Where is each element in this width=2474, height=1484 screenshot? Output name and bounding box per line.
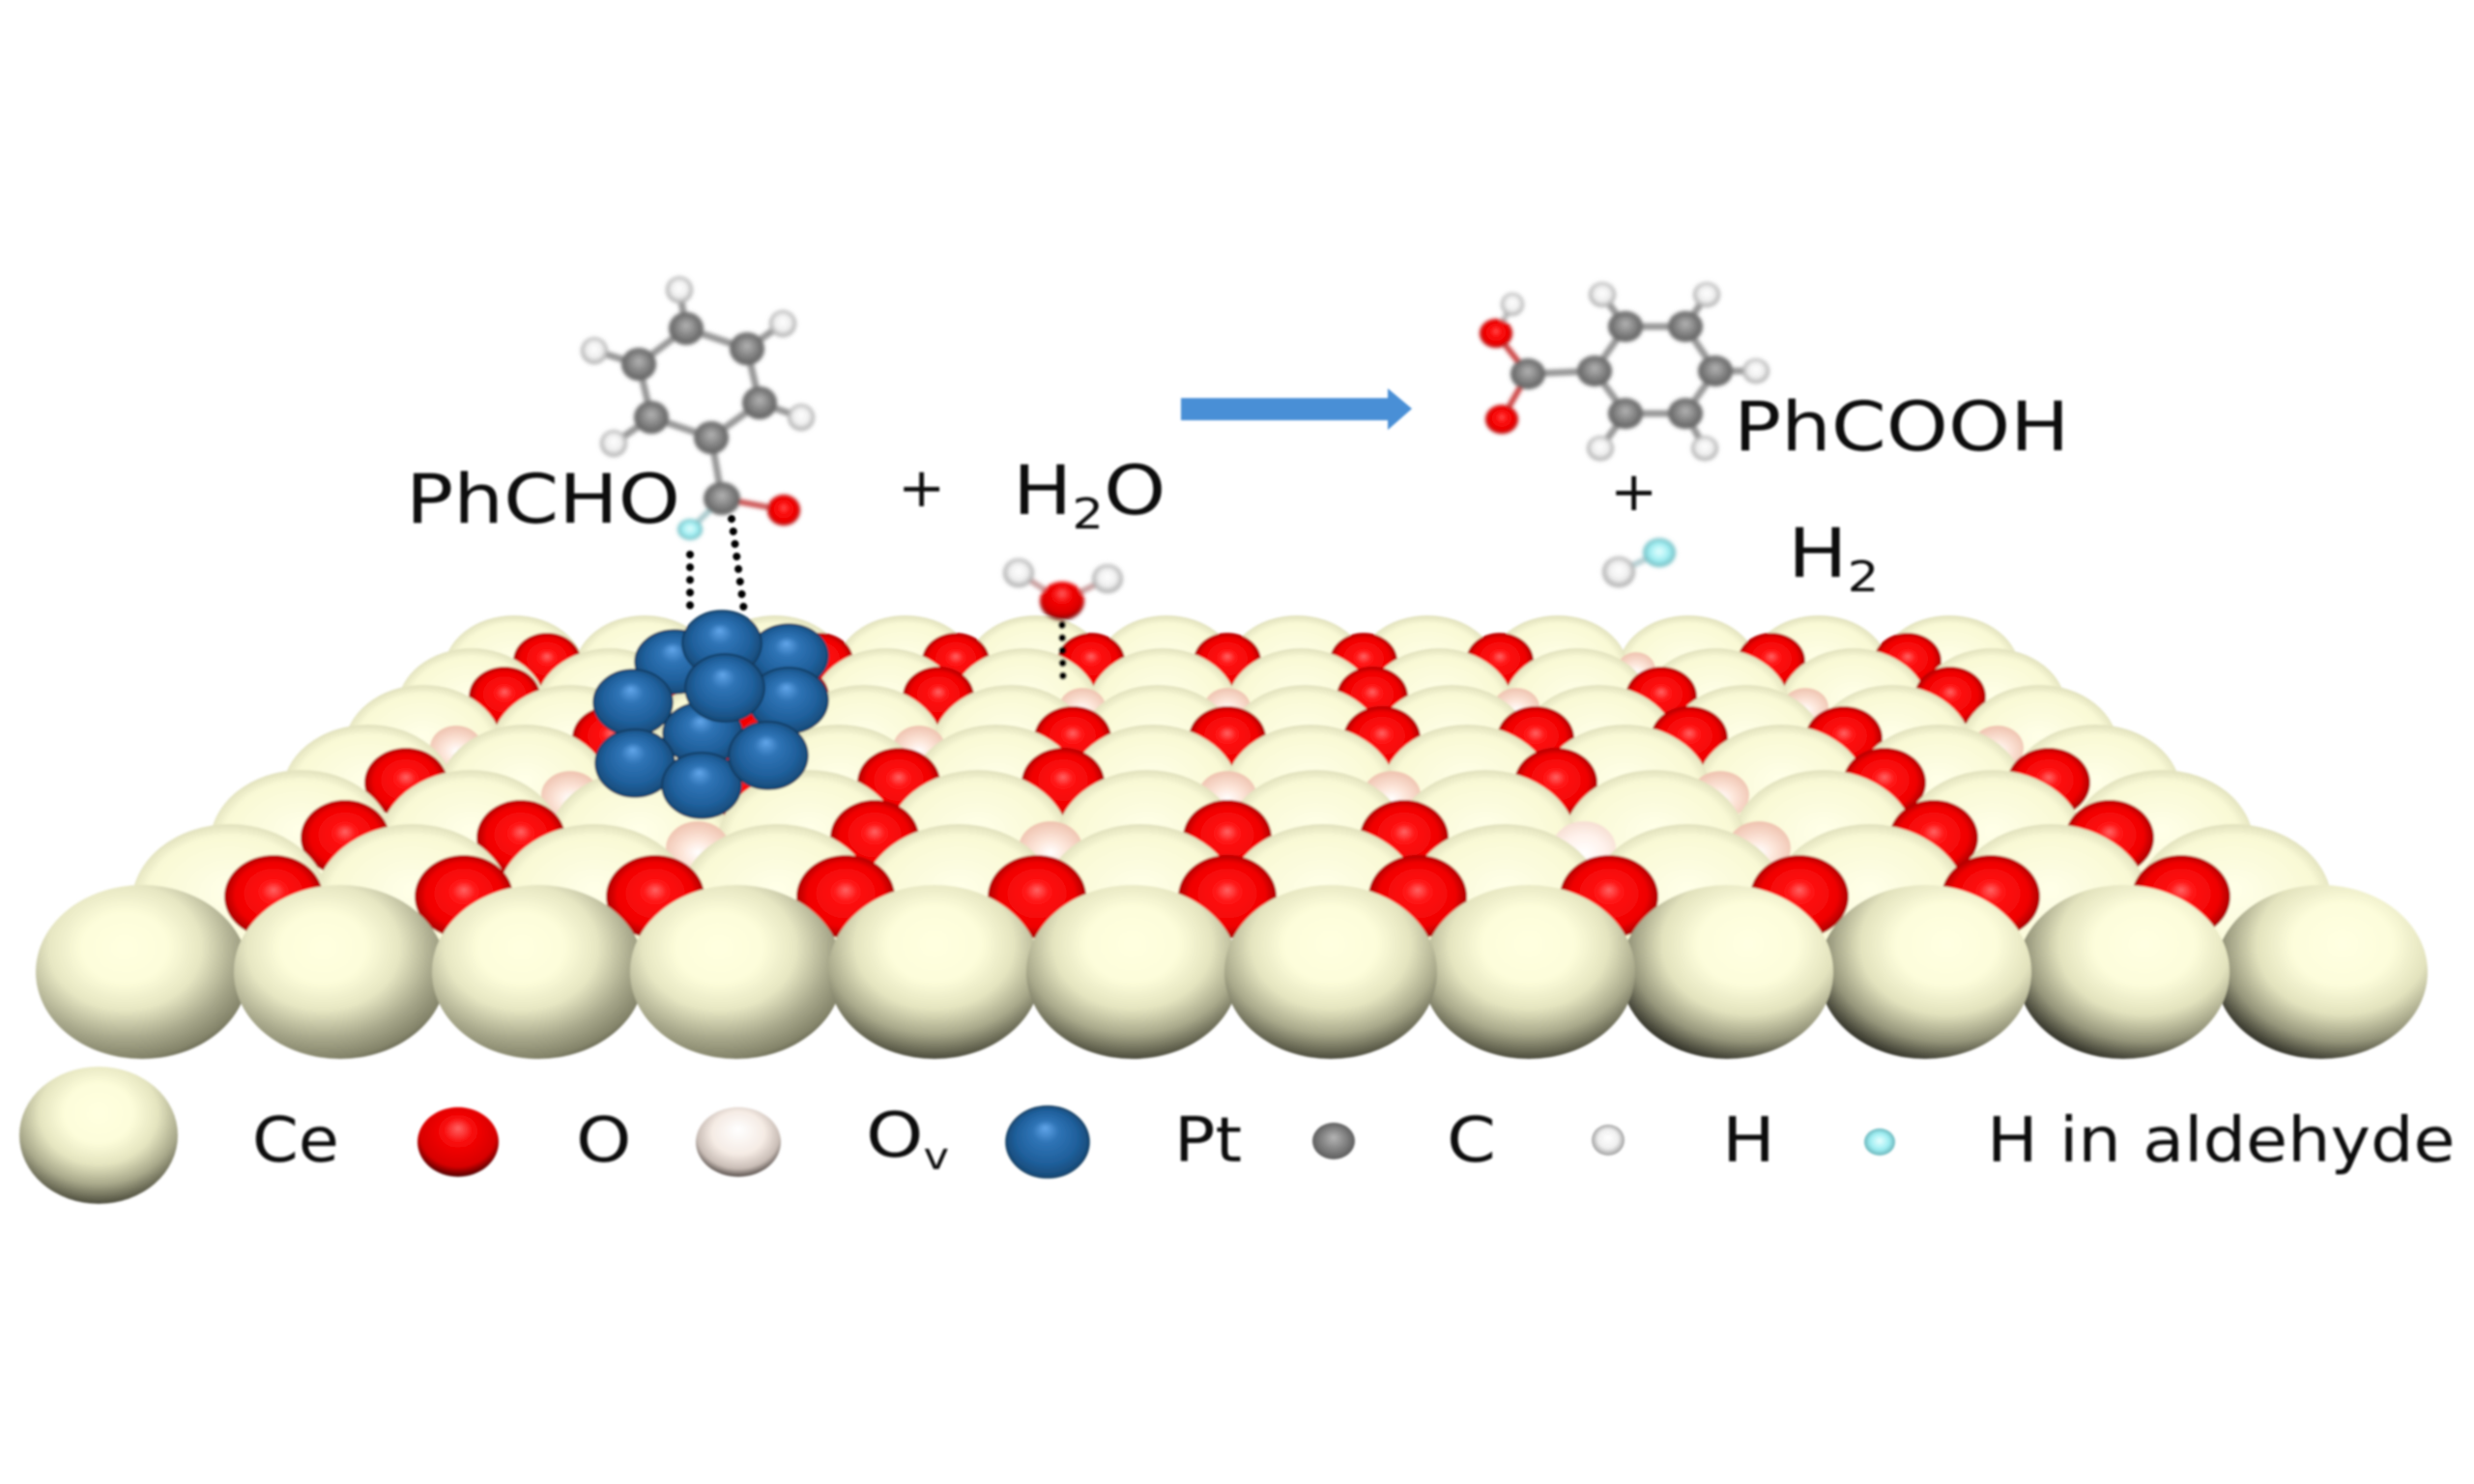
Ce row 1 (front) [36,885,2428,1059]
O row d [430,706,2024,770]
molecule: benzaldehyde PhCHO [581,276,815,540]
legend: H in aldehyde: H in aldehyde [1987,1104,2456,1176]
plus sign right: + [1610,460,1657,524]
legend: Ce [19,1067,339,1204]
label: H2: 2 [1848,553,1879,602]
Ce row 6 [397,648,2066,768]
Ce row 7 (back) [444,615,2020,728]
dotted bonds: aldehyde to Pt [690,519,744,612]
label: H2: H [1788,514,1848,593]
legend: Ov: O [866,1099,923,1172]
legend: Ov [696,1099,949,1178]
label: H2O: 2 [1072,490,1104,539]
molecule: H2 [1602,538,1676,587]
label: H2O: O [1104,451,1165,530]
legend: O: O [576,1104,631,1177]
legend: Pt: Pt [1174,1104,1242,1176]
legend: C: C [1447,1104,1496,1177]
legend: C [1312,1104,1496,1177]
O row e [469,667,1986,727]
O row b [301,800,2154,875]
label: PhCHO: PhCHO [406,460,680,539]
O row a [224,855,2230,938]
O row c [364,748,2090,819]
legend: Ce: Ce [252,1103,339,1176]
Ce row 4 [282,725,2181,862]
legend: Ov: v [923,1134,949,1178]
dotted bond: water to surface [1062,625,1063,682]
panel: CeO2 surface lattice [36,615,2428,1059]
Pt cluster [593,611,828,818]
O row f [513,633,1942,689]
label: PhCOOH: PhCOOH [1734,387,2069,467]
legend: H [1592,1104,1775,1177]
legend [19,1067,2456,1204]
Ce row 2 [131,824,2332,985]
legend: Pt [1006,1104,1242,1178]
Ce row 5 [344,685,2118,813]
arrow: reaction direction [1181,388,1412,430]
Ce row 3 [210,770,2254,919]
plus sign left: + [898,456,945,520]
molecule: benzoic acid PhCOOH [1480,282,1769,461]
molecule: water [1003,558,1123,620]
label: H2O: H [1013,451,1072,530]
legend: O [417,1104,631,1177]
legend: H: H [1722,1104,1775,1177]
